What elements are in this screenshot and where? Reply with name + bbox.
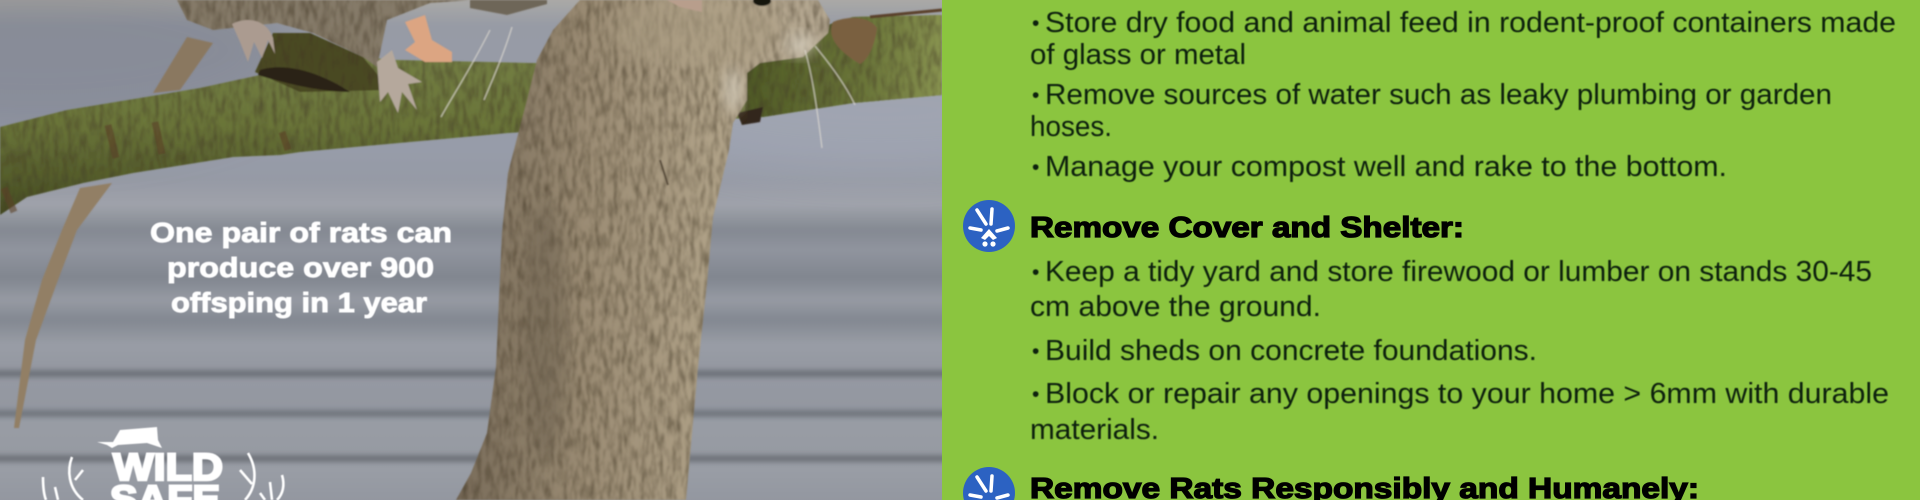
rat highlights	[523, 0, 814, 460]
section: remove food and water: •	[1032, 12, 1039, 35]
text: rat reproduction fact: One pair of rats can	[150, 217, 452, 248]
text: rat reproduction fact	[150, 217, 452, 318]
logo antlers	[43, 453, 283, 500]
section: remove cover and shelter: •	[1032, 340, 1039, 363]
section: remove food and water	[1030, 7, 1896, 183]
small rat on branch	[177, 0, 547, 113]
section: remove food and water: •	[1032, 84, 1039, 107]
section: remove cover and shelter: cm above the ground.	[1030, 291, 1321, 323]
section: remove cover and shelter: Keep a tidy yard and store firewood or lumber on stands 30-45	[1045, 256, 1872, 288]
photo scene	[0, 0, 942, 500]
panel: rat photo	[0, 0, 1120, 500]
section: remove cover and shelter: •	[1032, 383, 1039, 406]
heading: remove cover and shelter: Remove Cover and Shelter:	[1030, 212, 1464, 244]
logo: WildSafe	[43, 427, 283, 500]
panel: prevention advice	[942, 0, 1920, 500]
logo wordmark: WILD	[113, 447, 223, 489]
section: remove cover and shelter: •	[1032, 261, 1039, 284]
section: remove food and water: Store dry food and animal feed in rodent-proof containers made	[1045, 7, 1896, 39]
section: remove cover and shelter: materials.	[1030, 414, 1159, 446]
green panel background	[942, 0, 1920, 500]
large standing rat	[456, 0, 830, 500]
section: remove cover and shelter: Block or repair any openings to your home > 6mm with durable	[1045, 378, 1889, 410]
section: remove food and water: •	[1032, 156, 1039, 179]
icon: paw print 1	[963, 200, 1015, 252]
whiskers	[441, 27, 855, 148]
text: rat reproduction fact: offsping in 1 year	[171, 287, 427, 318]
section: remove food and water: Manage your compost well and rake to the bottom.	[1045, 151, 1727, 183]
branch bark marks and knot	[4, 10, 942, 212]
text: rat reproduction fact: produce over 900	[167, 252, 434, 283]
logo cat silhouette	[97, 427, 162, 448]
icon: paw print 2	[963, 467, 1015, 500]
section: remove cover and shelter: Build sheds on concrete foundations.	[1045, 335, 1537, 367]
section: remove food and water: of glass or metal	[1030, 39, 1246, 71]
photo background: blurred corrugated wall	[0, 0, 1120, 500]
branch	[0, 15, 942, 215]
section: remove food and water: Remove sources of water such as leaky plumbing or garden	[1045, 79, 1832, 111]
rat tail	[14, 37, 213, 428]
section: remove cover and shelter	[1030, 256, 1889, 446]
section: remove food and water: hoses.	[1030, 111, 1112, 143]
